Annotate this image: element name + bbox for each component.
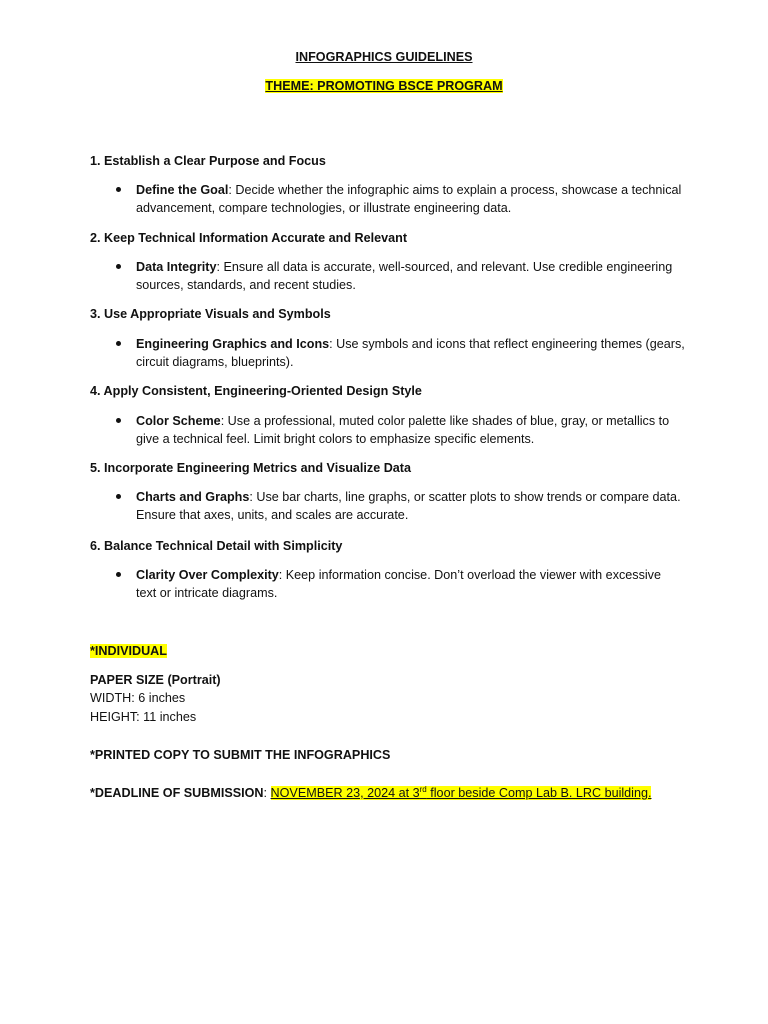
section 3: 3. Use Appropriate Visuals and Symbols bbox=[90, 307, 331, 321]
section 1: Define the Goal: Decide whether the infographic aims to explain a process, showcase a technical bbox=[136, 183, 681, 197]
section 4: 4. Apply Consistent, Engineering-Oriented Design Style bbox=[90, 384, 422, 398]
section 5 bbox=[90, 461, 681, 522]
section 2: 2. Keep Technical Information Accurate and Relevant bbox=[90, 231, 407, 245]
section 6 bbox=[90, 539, 661, 600]
section 6: 6. Balance Technical Detail with Simplicity bbox=[90, 539, 342, 553]
printed copy note: *PRINTED COPY TO SUBMIT THE INFOGRAPHICS bbox=[90, 748, 390, 762]
title: INFOGRAPHICS GUIDELINES bbox=[295, 50, 473, 64]
paper size: PAPER SIZE (Portrait) bbox=[90, 673, 221, 687]
section 6: Clarity Over Complexity: Keep information concise. Don’t overload the viewer with excessive bbox=[136, 568, 661, 582]
paper size: HEIGHT: 11 inches bbox=[90, 710, 196, 724]
section 3: circuit diagrams, blueprints). bbox=[136, 355, 293, 369]
section 1 bbox=[90, 154, 681, 215]
section 5: 5. Incorporate Engineering Metrics and Visualize Data bbox=[90, 461, 411, 475]
section 2: Data Integrity: Ensure all data is accurate, well-sourced, and relevant. Use credible engineering bbox=[136, 260, 672, 274]
section 5: Charts and Graphs: Use bar charts, line graphs, or scatter plots to show trends or compare data. bbox=[136, 490, 681, 504]
section 1: advancement, compare technologies, or illustrate engineering data. bbox=[136, 201, 511, 215]
section 1: 1. Establish a Clear Purpose and Focus bbox=[90, 154, 326, 168]
section 2: sources, standards, and recent studies. bbox=[136, 278, 356, 292]
section 4 bbox=[90, 384, 669, 446]
section 4: give a technical feel. Limit bright colors to emphasize specific elements. bbox=[136, 432, 534, 446]
section 3: Engineering Graphics and Icons: Use symbols and icons that reflect engineering themes (gears, bbox=[136, 337, 685, 351]
section 5: Ensure that axes, units, and scales are accurate. bbox=[136, 508, 408, 522]
section 2 bbox=[90, 231, 672, 292]
deadline: *DEADLINE OF SUBMISSION: NOVEMBER 23, 2024 at 3rd floor beside Comp Lab B. LRC building. bbox=[90, 785, 651, 800]
section 3 bbox=[90, 307, 685, 369]
individual label: *INDIVIDUAL bbox=[90, 644, 167, 658]
section 4: Color Scheme: Use a professional, muted color palette like shades of blue, gray, or metallics to bbox=[136, 414, 669, 428]
paper size: WIDTH: 6 inches bbox=[90, 691, 185, 705]
section 6: text or intricate diagrams. bbox=[136, 586, 277, 600]
theme: THEME: PROMOTING BSCE PROGRAM bbox=[265, 79, 503, 93]
paper size bbox=[90, 673, 221, 724]
